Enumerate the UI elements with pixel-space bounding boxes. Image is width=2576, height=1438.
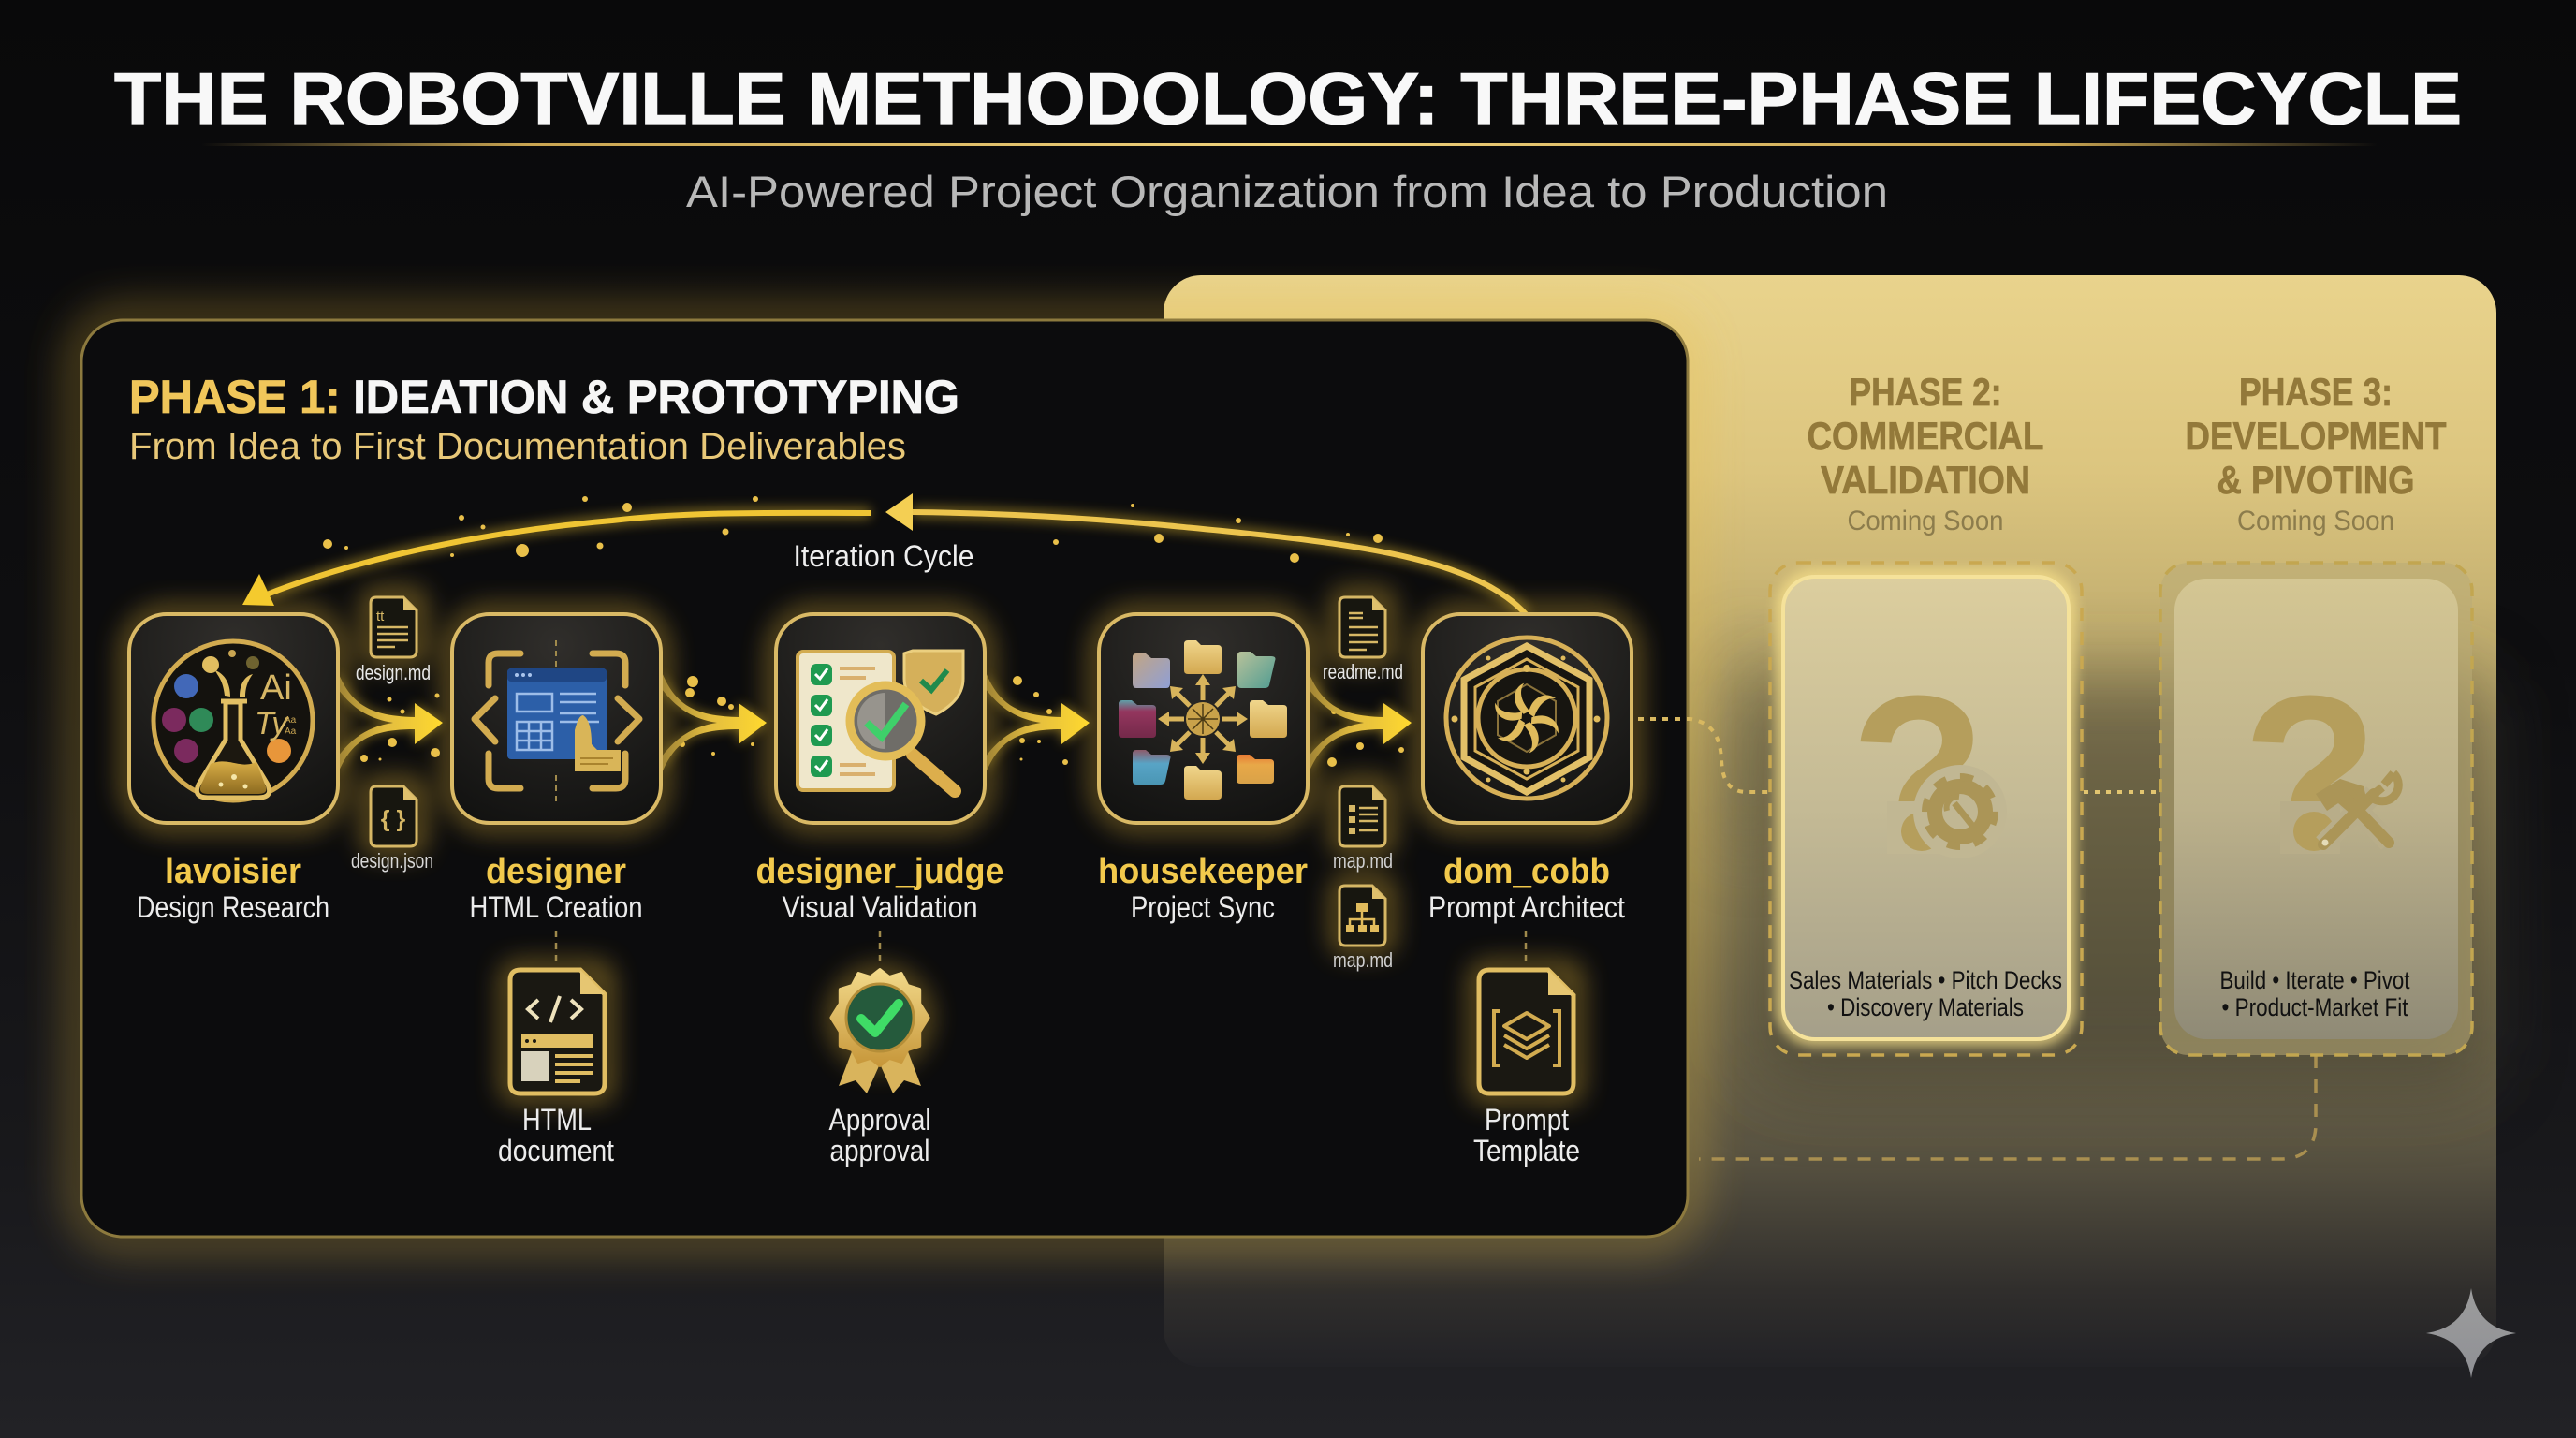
deliverable connectors: [556, 931, 1526, 962]
icon: flask and palette: Aa: [285, 726, 297, 737]
agent: lavoisier: lavoisier: [165, 852, 301, 891]
heading: phase 3: PHASE 3:: [2239, 370, 2393, 414]
label: design.md: design.md: [356, 661, 431, 684]
heading: phase 2: VALIDATION: [1821, 458, 2030, 502]
label: approval: Approval: [829, 1103, 930, 1137]
deliverable: HTML document: [510, 970, 605, 1093]
phase 3 status: Coming Soon: [2237, 506, 2394, 536]
heading: phase 3: & PIVOTING: [2217, 458, 2415, 502]
agent: dom_cobb: [1428, 852, 1625, 924]
agent: designer_judge: Visual Validation: [783, 890, 977, 924]
file: map.md outline: [1339, 786, 1385, 846]
icon: flask and palette: Ai: [260, 668, 292, 708]
icon: sparkle watermark: [2426, 1288, 2516, 1378]
agent: housekeeper: housekeeper: [1098, 852, 1308, 891]
agent: designer: HTML Creation: [470, 890, 642, 924]
heading: phase 3: [2185, 370, 2447, 502]
label: prompt template: Template: [1473, 1134, 1580, 1167]
file: design.md: tt: [376, 609, 385, 624]
agent: housekeeper: Project Sync: [1131, 890, 1275, 924]
label: prompt template: [1473, 1103, 1580, 1167]
icon: hexagon spiral emblem: [1446, 638, 1607, 799]
particles: [323, 496, 1404, 767]
file: design.json: { }: [381, 806, 405, 832]
label: map.md second: map.md: [1333, 948, 1393, 972]
phase 3 items: [2220, 966, 2410, 1021]
icon: browser mockup: [475, 640, 639, 801]
title: THE ROBOTVILLE METHODOLOGY: THREE-PHASE LIFECYCLE: [114, 57, 2462, 139]
connector: phase 2 to phase 3: [2084, 790, 2160, 794]
label: readme.md: readme.md: [1323, 660, 1403, 683]
tile: lavoisier: [129, 614, 338, 823]
arrow: housekeeper to dom_cobb: [1309, 672, 1412, 773]
label: prompt template: Prompt: [1485, 1103, 1569, 1137]
connector: phase 3 back to phase 1: [1699, 1055, 2316, 1159]
heading: phase 2: PHASE 2:: [1850, 370, 2001, 414]
agent: lavoisier: Design Research: [137, 890, 329, 924]
agent: designer: designer: [486, 852, 626, 891]
arrow: iteration cycle glow: [267, 512, 1526, 614]
tile: housekeeper: [1099, 614, 1308, 823]
icon: question mark with tools: ?: [2243, 650, 2378, 898]
iteration cycle label: Iteration Cycle: [794, 539, 973, 573]
icon: flask and palette: Ty: [255, 706, 289, 741]
heading: phase 1: PHASE 1: IDEATION & PROTOTYPING: [129, 371, 959, 423]
label: approval: [829, 1103, 930, 1167]
label: map.md: map.md: [1333, 849, 1393, 873]
file: design.md: [371, 597, 417, 657]
arrow glows: [338, 672, 1412, 773]
tile glows: [129, 596, 1632, 1094]
phase 2 items: [1789, 966, 2062, 1021]
file: design.json: [371, 786, 417, 846]
arrow: designer to designer_judge: [662, 672, 767, 773]
heading: phase 2: [1807, 370, 2044, 502]
label: approval: approval: [829, 1134, 930, 1167]
agent: lavoisier: [137, 852, 329, 924]
agent: designer: [470, 852, 642, 924]
panel: coming-soon phases backdrop: [1164, 275, 2496, 1367]
agent: dom_cobb: Prompt Architect: [1428, 890, 1625, 924]
heading: phase 2: COMMERCIAL: [1807, 414, 2044, 458]
subtitle: AI-Powered Project Organization from Idea to Production: [686, 167, 1888, 216]
icon: checklist, shield and magnifier: [798, 651, 963, 791]
agent: housekeeper: [1098, 852, 1308, 924]
phase 1 subheading: From Idea to First Documentation Deliverables: [129, 426, 906, 467]
icon: flask and palette: [154, 641, 313, 800]
file: map.md tree: [1339, 886, 1385, 946]
phase 2 status: Coming Soon: [1848, 506, 2003, 536]
label: design.json: design.json: [351, 849, 433, 873]
card: phase 2: [1770, 563, 2082, 1055]
deliverable: approval badge: [831, 970, 929, 1093]
heading: phase 3: DEVELOPMENT: [2185, 414, 2447, 458]
deliverable: prompt template: [1479, 970, 1573, 1093]
card: phase 3: [2160, 563, 2472, 1055]
tile: designer_judge: [776, 614, 985, 823]
file: readme.md: [1339, 597, 1385, 657]
label: HTML document: [498, 1103, 614, 1167]
phase 3 items: Build • Iterate • Pivot: [2220, 966, 2410, 994]
agent: designer_judge: designer_judge: [756, 852, 1003, 891]
phase 3 items: • Product-Market Fit: [2222, 993, 2408, 1021]
agent: dom_cobb: dom_cobb: [1443, 852, 1610, 891]
tile: designer: [452, 614, 661, 823]
panel 1 glow: [81, 320, 1688, 1237]
phase 2 items: • Discovery Materials: [1827, 993, 2024, 1021]
label: HTML document: document: [498, 1134, 614, 1167]
icon: folders radiating from hub: [1119, 640, 1287, 800]
tile: dom_cobb: [1423, 614, 1632, 823]
agent: designer_judge: [756, 852, 1003, 924]
icon: flask and palette: Aa: [285, 715, 297, 726]
arrow: iteration cycle: [242, 493, 1526, 614]
phase 2 items: Sales Materials • Pitch Decks: [1789, 966, 2062, 994]
arrow: designer_judge to housekeeper: [986, 672, 1090, 773]
connector: phase 1 to phase 2: [1638, 719, 1769, 792]
label: HTML document: HTML: [522, 1103, 592, 1137]
icon: question mark with gear: ?: [1851, 650, 1985, 898]
arrow: lavoisier to designer: [338, 672, 443, 773]
panel: phase 1: [81, 320, 1688, 1237]
